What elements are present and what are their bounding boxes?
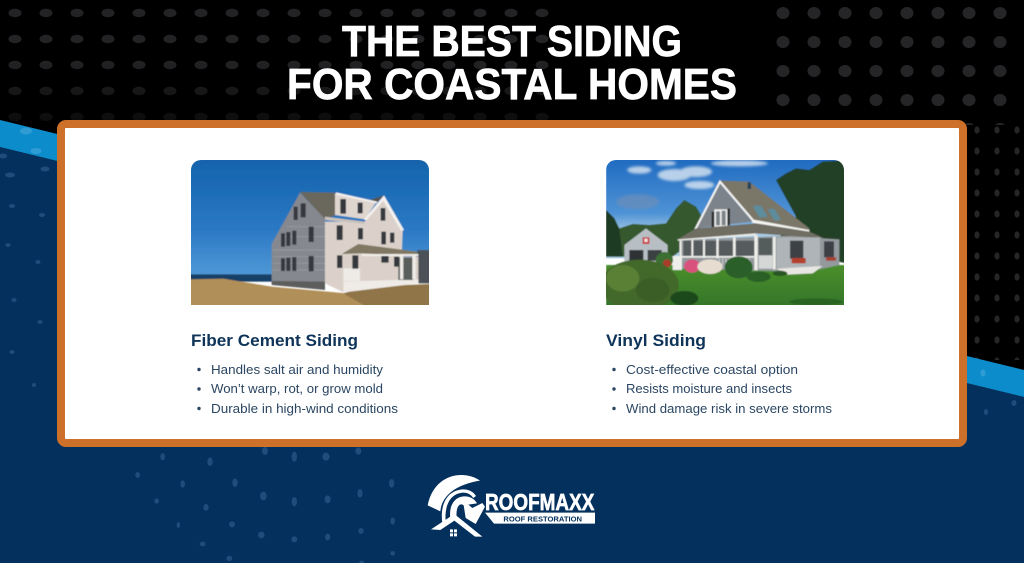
bullet list: fiber cement benefits — [197, 363, 398, 416]
bullet list: vinyl benefits: Wind damage risk in severe storms — [626, 402, 832, 416]
panel: siding comparison card — [61, 124, 963, 443]
title — [287, 17, 737, 109]
bullet list: vinyl benefits: Cost-effective coastal option — [626, 363, 798, 377]
bullet list: vinyl benefits — [612, 363, 832, 416]
bullet list: fiber cement benefits: Handles salt air and humidity — [211, 363, 384, 377]
title: FOR COASTAL HOMES — [287, 60, 737, 109]
bullet list: fiber cement benefits: Durable in high-wind conditions — [211, 402, 398, 416]
tagline bar: ROOF RESTORATION — [503, 514, 582, 523]
logo: Roofmaxx Roof Restoration — [428, 475, 595, 537]
icon: spartan helmet with roof — [428, 475, 485, 537]
heading: vinyl siding: Vinyl Siding — [606, 331, 706, 350]
bullet list: vinyl benefits: Resists moisture and insects — [626, 382, 792, 396]
tagline bar — [485, 513, 595, 524]
heading: fiber cement siding: Fiber Cement Siding — [191, 331, 358, 350]
title: THE BEST SIDING — [342, 17, 682, 66]
wordmark: ROOFMAXX — [485, 489, 595, 515]
bullet list: fiber cement benefits: Won’t warp, rot, or grow mold — [211, 382, 383, 396]
photo: fiber cement siding house — [190, 158, 432, 307]
photo: vinyl siding house — [606, 160, 844, 305]
